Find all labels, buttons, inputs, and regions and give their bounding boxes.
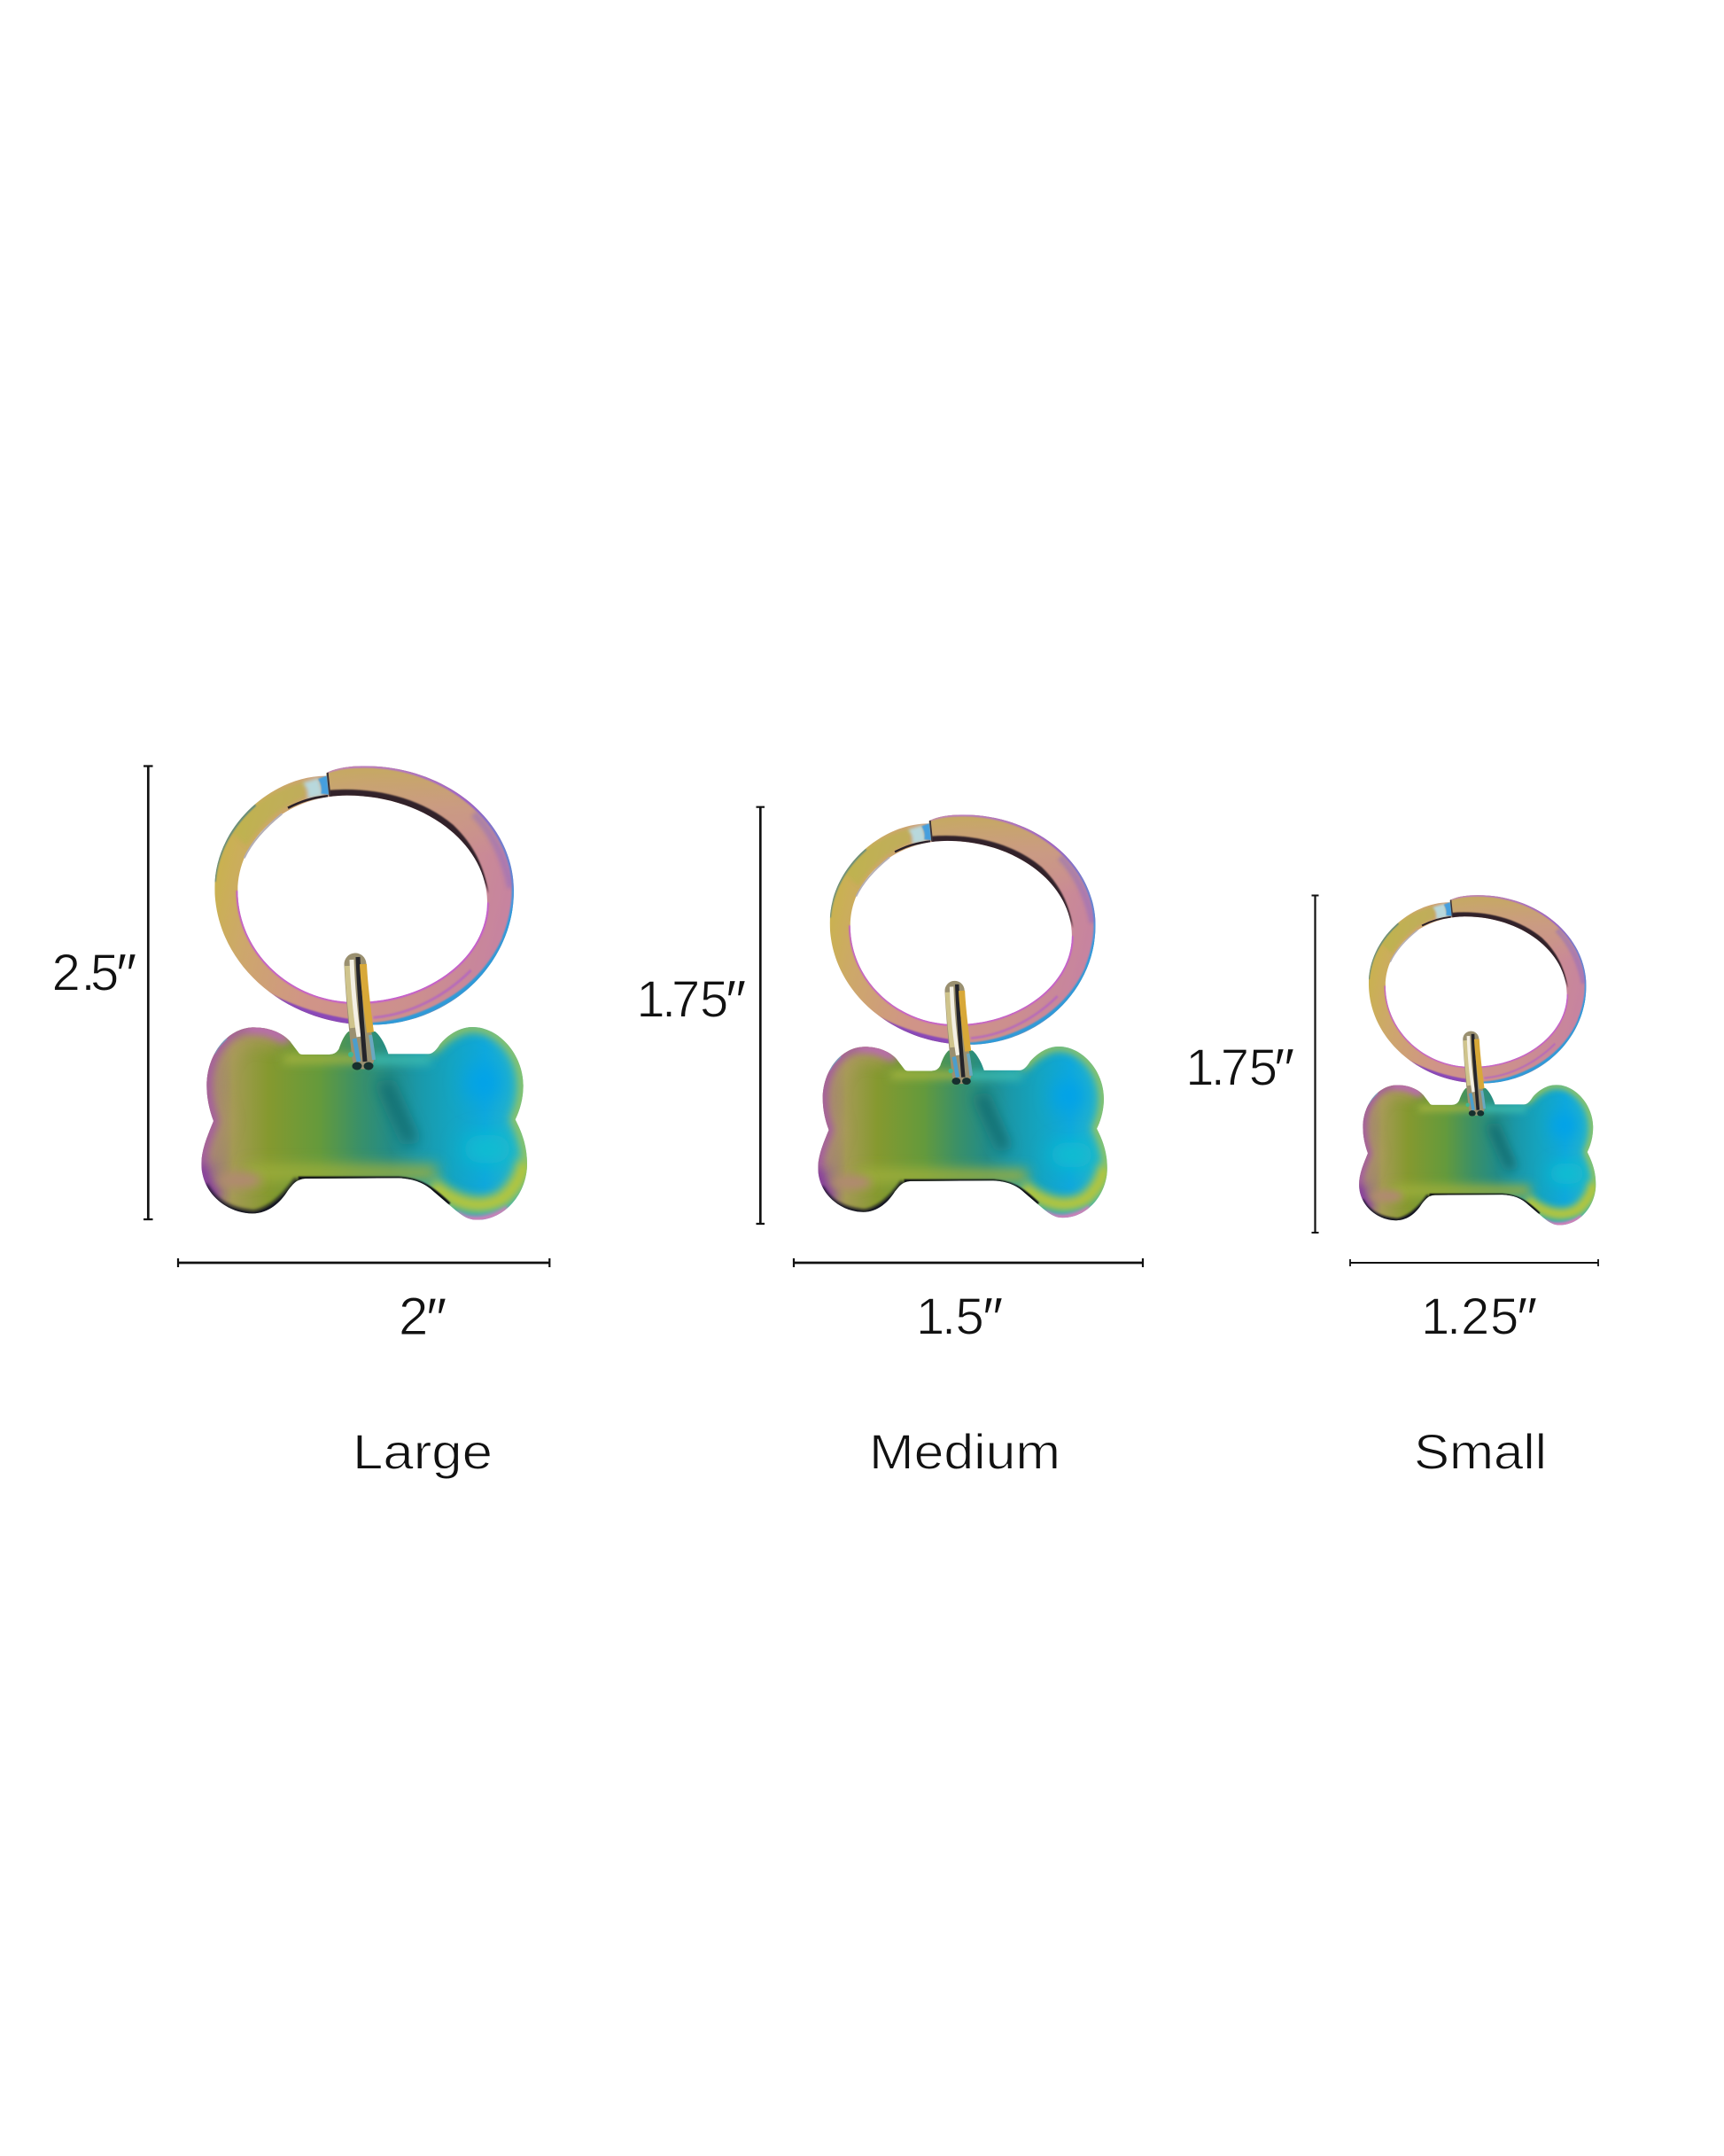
height dimension line: 1.75 inch [757, 807, 765, 1224]
width dimension line: 1.5 inch [794, 1258, 1143, 1267]
height dimension line: 2.5 inch [144, 766, 152, 1219]
width label: ″ [1517, 1285, 1537, 1350]
bone tag [812, 1039, 1119, 1228]
height label: ″ [116, 941, 136, 1007]
key ring [208, 758, 527, 1035]
key ring [824, 807, 1107, 1054]
tag illustration: medium [812, 807, 1119, 1228]
width label: ″ [426, 1285, 447, 1350]
height label: 2.5 [51, 945, 119, 1001]
panel: medium tag [636, 807, 1143, 1480]
size name: Large [353, 1423, 493, 1480]
width label: 2 [399, 1287, 428, 1346]
height label: 1.75 [1185, 1039, 1277, 1097]
width dimension line: 2 inch [178, 1258, 549, 1267]
height label: ″ [726, 968, 746, 1033]
key ring [1364, 889, 1596, 1091]
width dimension line: 1.25 inch [1350, 1259, 1598, 1266]
width label: 1.25 [1421, 1288, 1518, 1345]
bone tag [195, 1019, 540, 1232]
size name: Small [1414, 1423, 1547, 1480]
bone tag [1355, 1079, 1605, 1234]
size name: Medium [869, 1423, 1060, 1480]
split ring [1465, 1034, 1485, 1117]
panel: small tag [1185, 889, 1605, 1480]
tag illustration: large [195, 758, 540, 1232]
panel: large tag [51, 758, 549, 1480]
width label: ″ [982, 1285, 1003, 1350]
height label: 1.75 [636, 971, 728, 1028]
width label: 1.5 [916, 1288, 984, 1345]
split ring [347, 957, 374, 1070]
split ring [948, 985, 971, 1085]
height dimension line: 1.75 inch [1311, 895, 1318, 1233]
tag illustration: small [1355, 889, 1605, 1234]
height label: ″ [1274, 1036, 1294, 1101]
